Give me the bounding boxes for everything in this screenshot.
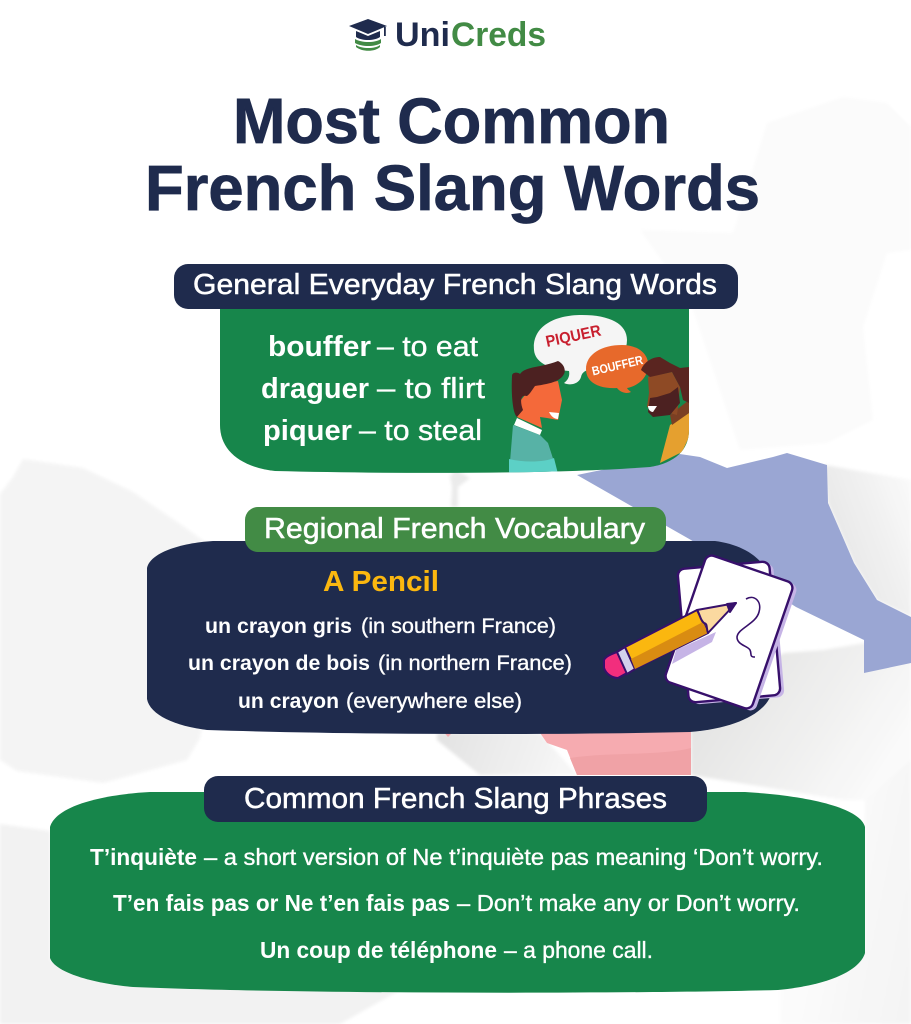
- vocabulary list: un crayon de bois: [188, 652, 370, 675]
- phrase list: – Don’t make any or Don’t worry.: [457, 890, 800, 916]
- word list: bouffer: [268, 331, 371, 363]
- heading: regional vocabulary: Regional French Vocabulary: [264, 513, 646, 545]
- phrase list: Un coup de téléphone: [260, 937, 497, 963]
- heading: common phrases: Common French Slang Phrases: [244, 783, 667, 815]
- panel: regional vocabulary: [147, 541, 798, 734]
- heading: general everyday: [174, 264, 738, 309]
- vocabulary list: un crayon gris: [205, 615, 352, 638]
- subheading: a pencil: A Pencil: [323, 566, 439, 598]
- speech bubble: bouffer: BOUFFER: [591, 353, 644, 378]
- phrase list: – a short version of Ne t’inquiète pas meaning ‘Don’t worry.: [204, 844, 823, 870]
- icon: graduation cap on coins: [349, 19, 387, 51]
- word list: – to eat: [377, 331, 478, 363]
- vocabulary list: (in northern France): [378, 652, 572, 675]
- title: [145, 85, 760, 224]
- title: Most Common: [233, 85, 670, 157]
- word list: [261, 331, 485, 447]
- man right: [641, 357, 689, 463]
- panel: general everyday slang words: [220, 300, 689, 474]
- vocabulary list: [188, 615, 572, 713]
- vocabulary list: (in southern France): [361, 615, 556, 638]
- vocabulary list: (everywhere else): [346, 690, 522, 713]
- word list: – to flirt: [377, 373, 485, 405]
- phrase list: – a phone call.: [504, 937, 653, 963]
- map: pink region of France: [442, 730, 691, 775]
- speech bubble: bouffer: [586, 345, 648, 393]
- man left: [509, 361, 565, 474]
- word list: piquer: [263, 415, 352, 447]
- title: French Slang Words: [145, 152, 760, 224]
- panel background: [220, 300, 689, 473]
- phrase list: [90, 844, 823, 963]
- phrase list: T’inquiète: [90, 844, 197, 870]
- heading: common phrases: [204, 776, 707, 822]
- panel background: [50, 792, 865, 993]
- icon: pencil and paper: [604, 554, 798, 712]
- word list: draguer: [261, 373, 369, 405]
- logo: Creds: [451, 16, 546, 54]
- wordmark: Uni: [395, 16, 450, 54]
- panel background: [147, 541, 772, 734]
- word list: – to steal: [359, 415, 482, 447]
- speech bubble: piquer: PIQUER: [544, 323, 603, 351]
- map: blue region of France: [577, 453, 911, 673]
- vocabulary list: un crayon: [238, 690, 339, 713]
- panel: common phrases: [50, 792, 865, 993]
- illustration: two men talking: [509, 315, 689, 474]
- heading: regional vocabulary: [245, 507, 666, 552]
- phrase list: T’en fais pas or Ne t’en fais pas: [113, 890, 450, 916]
- logo: [349, 16, 546, 54]
- speech bubble: piquer: [534, 315, 627, 384]
- heading: general everyday: General Everyday French Slang Words: [193, 269, 717, 301]
